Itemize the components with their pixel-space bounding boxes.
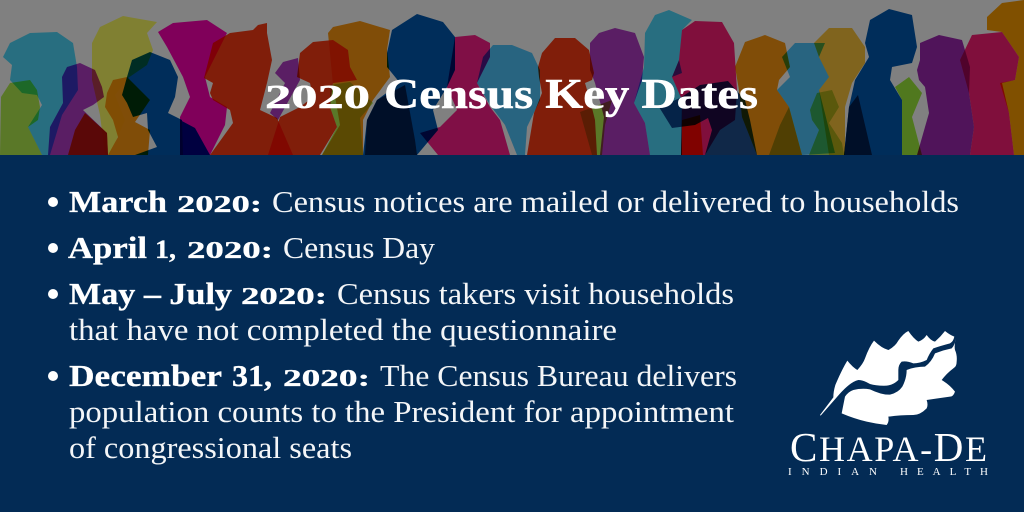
bullet: December 31, 2020: 2020: bbox=[283, 366, 370, 392]
bullet: May – July 2020: Census takers visit households bbox=[337, 276, 734, 311]
title: 2020 bbox=[265, 79, 370, 116]
bullet: December 31, 2020: December bbox=[69, 358, 222, 393]
logo tagline bbox=[788, 466, 988, 478]
bullet: May – July 2020: 2020: bbox=[241, 284, 327, 310]
logo: Chapa-De Indian Health bbox=[788, 331, 988, 478]
bullet: December 31, 2020: 31, bbox=[232, 358, 272, 393]
bullet: December 31, 2020: of congressional seats bbox=[69, 430, 352, 465]
bullet list of key dates bbox=[48, 184, 959, 465]
title bbox=[265, 72, 758, 118]
logo tagline: HEALTH bbox=[900, 466, 988, 478]
bullet: May – July 2020: May – July bbox=[69, 276, 233, 311]
bullet: May – July 2020: that have not completed the questionnaire bbox=[69, 312, 617, 347]
bullet: March 2020: 2020: bbox=[177, 192, 262, 218]
bullet: March 2020: March bbox=[69, 184, 167, 219]
banner: silhouettes of people bbox=[0, 0, 1024, 155]
logo wordmark: CHAPA-DE bbox=[790, 424, 987, 470]
icon: oak leaf bbox=[820, 331, 957, 425]
bullet: May – July 2020 bbox=[48, 276, 734, 347]
bullet: December 31, 2020: population counts to the President for appointment bbox=[69, 394, 734, 429]
bullet: March 2020: Census notices are mailed or delivered to households bbox=[272, 184, 959, 219]
bullet: April 1, 2020 bbox=[48, 230, 436, 265]
bullet: April 1, 2020: Census Day bbox=[283, 230, 436, 265]
bullet: April 1, 2020: 2020: bbox=[187, 238, 273, 264]
bullet: April 1, 2020: 1, bbox=[155, 235, 176, 264]
bullet: December 31, 2020 bbox=[48, 358, 737, 465]
logo tagline: INDIAN bbox=[788, 466, 877, 478]
bullet: December 31, 2020: The Census Bureau delivers bbox=[380, 358, 737, 393]
title: Census Key Dates bbox=[384, 72, 758, 118]
bullet: April 1, 2020: April bbox=[68, 230, 147, 265]
